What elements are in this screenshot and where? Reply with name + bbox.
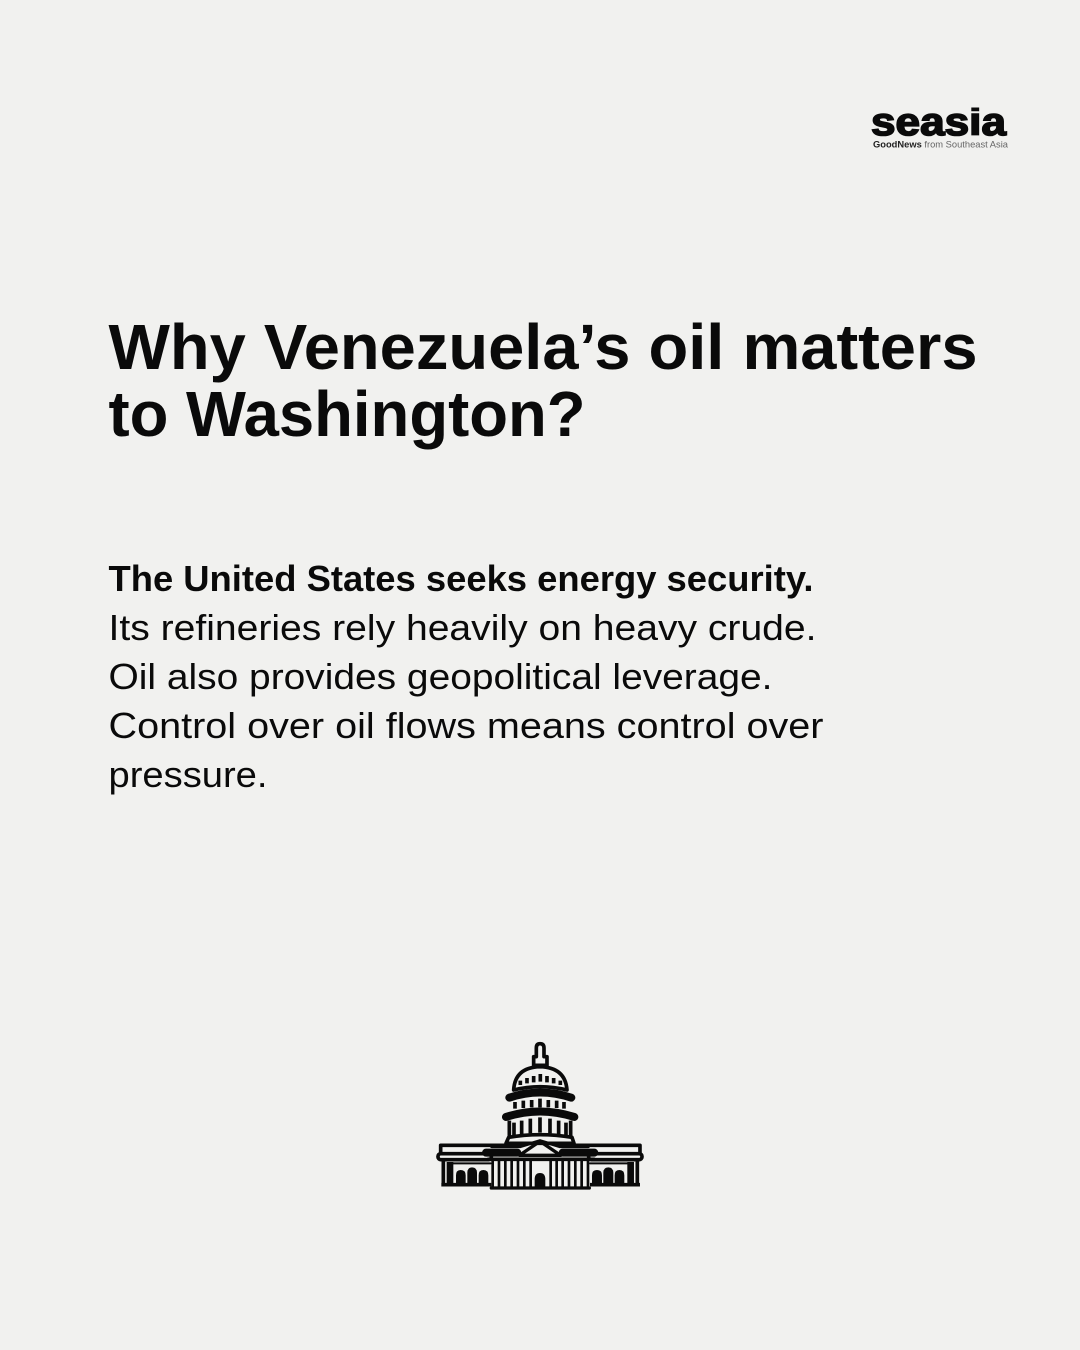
dome bbox=[514, 1067, 567, 1090]
icon: US Capitol building bbox=[438, 1044, 642, 1188]
central cornice bbox=[486, 1141, 594, 1165]
logo: seasia: seasia bbox=[871, 101, 1006, 144]
right wing facade bbox=[590, 1161, 640, 1185]
upper drum band bbox=[509, 1092, 571, 1098]
body text: Control over oil flows means control over bbox=[108, 705, 824, 746]
central door bbox=[535, 1173, 545, 1187]
wings cornice bbox=[438, 1154, 642, 1160]
body text bbox=[108, 558, 824, 795]
body text: Oil also provides geopolitical leverage. bbox=[108, 656, 772, 697]
wings upper roof bbox=[441, 1145, 640, 1153]
title bbox=[108, 311, 977, 450]
left wing facade bbox=[441, 1161, 491, 1185]
body text: pressure. bbox=[108, 754, 268, 795]
lantern on top of dome bbox=[534, 1044, 547, 1065]
central pediment bbox=[519, 1141, 561, 1155]
logo: seasia: GoodNews from Southeast Asia bbox=[873, 140, 1009, 150]
body text: Its refineries rely heavily on heavy crude. bbox=[108, 607, 816, 648]
central portico columns bbox=[493, 1161, 588, 1187]
lower drum band bbox=[506, 1111, 574, 1117]
central roof line bbox=[492, 1141, 588, 1147]
drum columns bbox=[509, 1117, 571, 1136]
title: to Washington? bbox=[108, 378, 586, 450]
body text: The United States seeks energy security. bbox=[108, 558, 814, 599]
title: Why Venezuela’s oil matters bbox=[108, 311, 977, 383]
